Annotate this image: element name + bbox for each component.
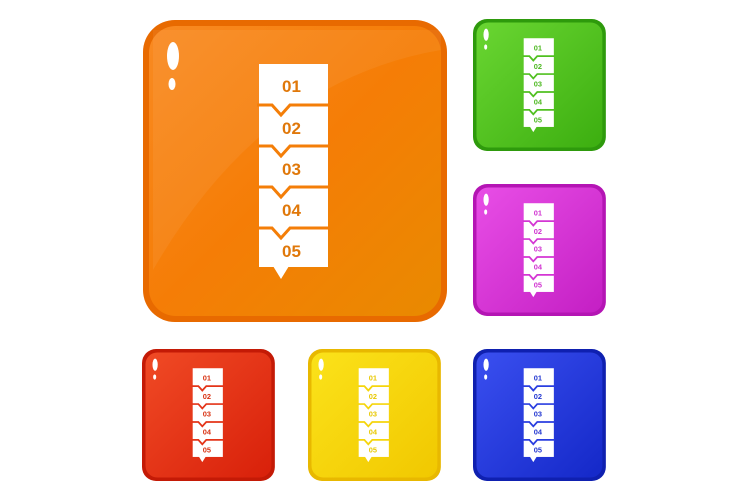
icon: green	[473, 19, 606, 151]
icon: red: 03	[203, 410, 211, 419]
icon: orange large: 04	[282, 201, 301, 220]
icon: blue: 02	[534, 392, 542, 401]
icon: red: 02	[203, 392, 211, 401]
icon: magenta	[473, 184, 606, 316]
icon: magenta: 05	[534, 281, 542, 290]
icon: red: 01	[203, 373, 211, 382]
icon: green: 02	[534, 62, 542, 71]
icon: blue: 05	[534, 446, 542, 455]
icon: green: 01	[534, 43, 542, 52]
icon: blue	[473, 349, 606, 481]
icon: orange large: 02	[282, 119, 301, 138]
icon: red	[142, 349, 275, 481]
icon: magenta: 01	[534, 208, 542, 217]
icon: red: 05	[203, 446, 211, 455]
icon: blue: 03	[534, 410, 542, 419]
icon: orange large: 01	[282, 77, 301, 96]
icon: yellow: 01	[369, 373, 377, 382]
icon: yellow	[308, 349, 441, 481]
icon: orange large	[143, 20, 447, 322]
icon: yellow: 04	[369, 428, 378, 437]
icon: red: 04	[203, 428, 212, 437]
list strip	[257, 64, 330, 279]
icon: orange large: 05	[282, 242, 301, 261]
icon: green: 05	[534, 116, 542, 125]
icon: yellow: 03	[369, 410, 377, 419]
icon: yellow: 02	[369, 392, 377, 401]
icon: magenta: 04	[534, 263, 543, 272]
icon: green: 03	[534, 80, 542, 89]
icon: green: 04	[534, 98, 543, 107]
icon: magenta: 03	[534, 245, 542, 254]
icon: blue: 04	[534, 428, 543, 437]
icon: yellow: 05	[369, 446, 377, 455]
icon: orange large: 03	[282, 160, 301, 179]
icon: blue: 01	[534, 373, 542, 382]
icon: magenta: 02	[534, 227, 542, 236]
